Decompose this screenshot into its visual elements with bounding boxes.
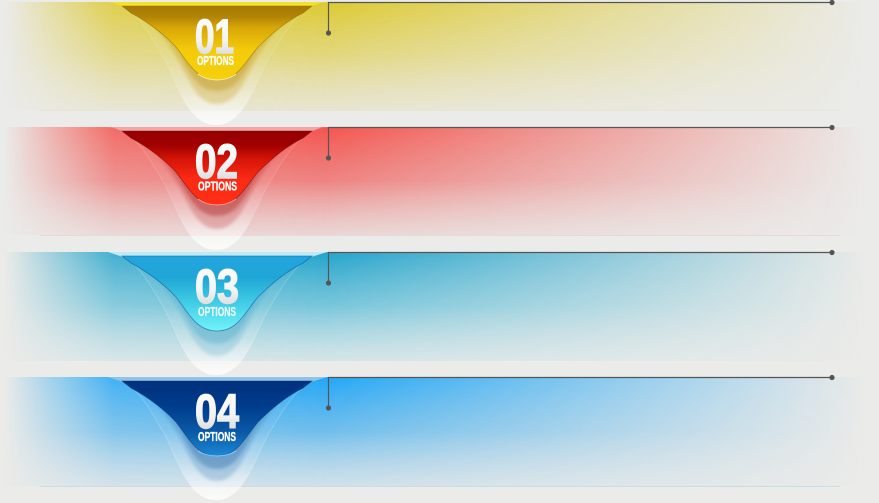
band bottom edge	[40, 486, 840, 487]
label OPTIONS: OPTIONS	[198, 304, 236, 319]
panel: option 01	[0, 0, 879, 125]
mid drop shadow	[125, 381, 309, 481]
connector line	[328, 378, 832, 408]
label OPTIONS: OPTIONS	[197, 53, 234, 68]
outer drop	[108, 377, 327, 500]
outer drop	[108, 2, 327, 125]
number 04: 04	[195, 386, 239, 439]
number 01: 01	[195, 11, 234, 64]
top stripe	[112, 127, 322, 133]
top stripe	[108, 252, 327, 258]
badge	[122, 6, 312, 80]
band bottom edge	[40, 110, 840, 111]
connector line	[328, 2, 832, 33]
inner drop shadow	[125, 256, 309, 344]
inner drop shadow	[125, 6, 309, 91]
dot: line end	[829, 125, 835, 130]
badge	[122, 131, 312, 205]
badge	[122, 381, 312, 456]
top stripe	[108, 377, 327, 383]
dot: drop end	[326, 280, 331, 286]
dot: drop end	[326, 30, 331, 36]
dot: line end	[829, 250, 835, 255]
dot: drop end	[326, 405, 331, 411]
dot: line end	[829, 0, 835, 5]
mid drop shadow	[125, 131, 309, 229]
inner drop shadow	[125, 381, 309, 469]
band: cyan gradient	[0, 252, 879, 361]
band: blue gradient	[0, 377, 879, 486]
top stripe	[112, 2, 322, 8]
dot: drop end	[326, 155, 331, 161]
connector line	[328, 252, 832, 283]
badge	[122, 256, 312, 331]
outer drop	[108, 127, 327, 250]
badge bottom highlight	[198, 451, 236, 456]
band bottom edge	[40, 235, 840, 236]
outer drop	[108, 252, 327, 375]
dot: line end	[829, 375, 835, 380]
label OPTIONS: OPTIONS	[198, 178, 237, 194]
badge bottom highlight	[198, 199, 236, 205]
inner drop shadow	[125, 131, 309, 216]
label OPTIONS: OPTIONS	[198, 429, 236, 444]
badge bottom highlight	[198, 74, 236, 80]
panel: option 03	[0, 250, 879, 375]
panel: option 02	[0, 125, 879, 250]
band: red gradient	[0, 127, 879, 235]
mid drop shadow	[125, 6, 309, 104]
mid drop shadow	[125, 256, 309, 356]
band: yellow gradient	[0, 2, 879, 110]
connector line	[328, 128, 832, 158]
number 03: 03	[195, 261, 239, 314]
number 02: 02	[195, 136, 238, 189]
panel: option 04	[0, 375, 879, 500]
